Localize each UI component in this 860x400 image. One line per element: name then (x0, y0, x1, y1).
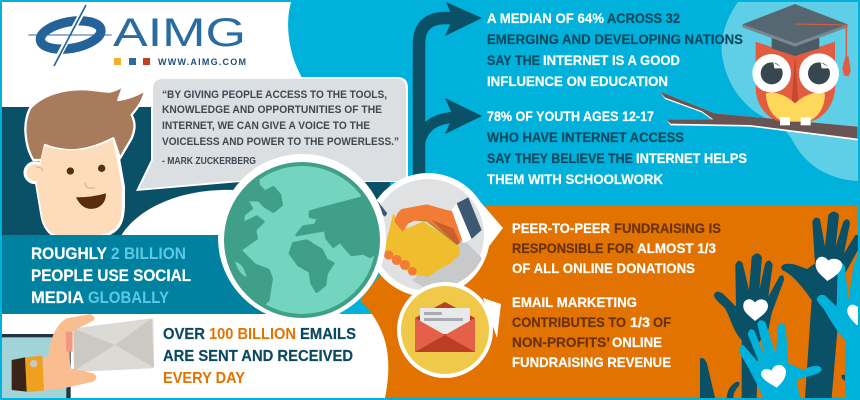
email marketing stat: OF (653, 315, 671, 330)
logo colour squares (114, 58, 150, 65)
icon: email envelope badge (397, 282, 501, 378)
fundraising stat: PEER-TO-PEER (512, 221, 610, 236)
logo: AIMG (28, 3, 246, 67)
quote text: INTERNET, WE CAN GIVE A VOICE TO THE (162, 120, 370, 132)
education stat 2: 78% OF YOUTH AGES 12-17 (487, 109, 654, 124)
branch (660, 92, 858, 140)
education stat 2: SAY THEY BELIEVE THE (487, 151, 633, 166)
social media stat: 2 BILLION (111, 245, 186, 263)
arrows: education (419, 2, 482, 176)
education stat 1: EMERGING AND DEVELOPING NATIONS (487, 32, 743, 47)
social media stat: PEOPLE USE SOCIAL (31, 267, 191, 285)
education stat 1: ACROSS 32 (607, 11, 680, 26)
icon: handshake (366, 173, 503, 297)
panel: white email area (2, 314, 402, 398)
email stat: OVER (163, 326, 205, 343)
fundraising stat: RESPONSIBLE FOR (512, 241, 634, 256)
education stat 1: SAY THE (487, 53, 540, 68)
fundraising stat (512, 221, 721, 276)
icon: globe (215, 154, 386, 322)
icon: hand holding envelope (2, 314, 154, 398)
email marketing stat: EMAIL MARKETING (512, 295, 637, 310)
icon: raised hands with hearts (700, 212, 858, 398)
quote text: VOICELESS AND POWER TO THE POWERLESS.” (162, 136, 399, 148)
panel: dark teal quote band (2, 107, 390, 237)
icon: owl on branch (660, 2, 858, 181)
social media stat: GLOBALLY (88, 289, 169, 307)
email stat: EVERY DAY (163, 370, 246, 387)
owl (742, 4, 851, 125)
social media stat: ROUGHLY (31, 245, 107, 263)
education stat 2: THEM WITH SCHOOLWORK (487, 172, 663, 187)
logo emblem (28, 3, 112, 67)
quote text (162, 89, 399, 167)
panel: white logo area (2, 2, 303, 110)
email stat: EMAILS (300, 326, 356, 343)
panel: orange fundraising area (360, 205, 858, 398)
email marketing stat: 1/3 (630, 315, 651, 330)
email marketing stat (512, 295, 671, 370)
education stat 1: A MEDIAN OF 64% (487, 11, 604, 26)
email stat (163, 326, 356, 387)
panel: social media band background (2, 235, 270, 314)
quote text: KNOWLEDGE AND OPPORTUNITIES OF THE (162, 104, 382, 116)
email marketing stat: FUNDRAISING REVENUE (512, 355, 671, 370)
education stat 2: INTERNET HELPS (636, 151, 747, 166)
quote text: “BY GIVING PEOPLE ACCESS TO THE TOOLS, (162, 89, 387, 101)
education stat 1 (487, 11, 743, 89)
panel: white swoosh behind globe (121, 190, 340, 314)
quote text: - MARK ZUCKERBERG (162, 156, 256, 167)
social media stat: MEDIA (31, 289, 84, 307)
logo url: WWW.AIMG.COM (158, 57, 246, 67)
email stat: ARE SENT AND RECEIVED (163, 348, 353, 365)
education stat 1: INTERNET IS A GOOD (543, 53, 680, 68)
speech bubble: quote (136, 77, 408, 191)
icon: cartoon face (25, 84, 145, 239)
education stat 2 (487, 109, 747, 187)
email marketing stat: ONLINE (612, 335, 662, 350)
education stat 1: INFLUENCE ON EDUCATION (487, 74, 668, 89)
fundraising stat: FUNDRAISING IS (614, 221, 721, 236)
social media stat (31, 245, 191, 307)
logo wordmark: AIMG (113, 11, 246, 55)
fundraising stat: ALMOST 1/3 (637, 241, 716, 256)
fundraising stat: OF ALL ONLINE DONATIONS (512, 261, 695, 276)
owl light circle (722, 2, 858, 181)
email marketing stat: CONTRIBUTES TO (512, 315, 626, 330)
email marketing stat: NON-PROFITS’ (512, 335, 610, 350)
email stat: 100 BILLION (209, 326, 296, 343)
education stat 2: WHO HAVE INTERNET ACCESS (487, 130, 684, 145)
